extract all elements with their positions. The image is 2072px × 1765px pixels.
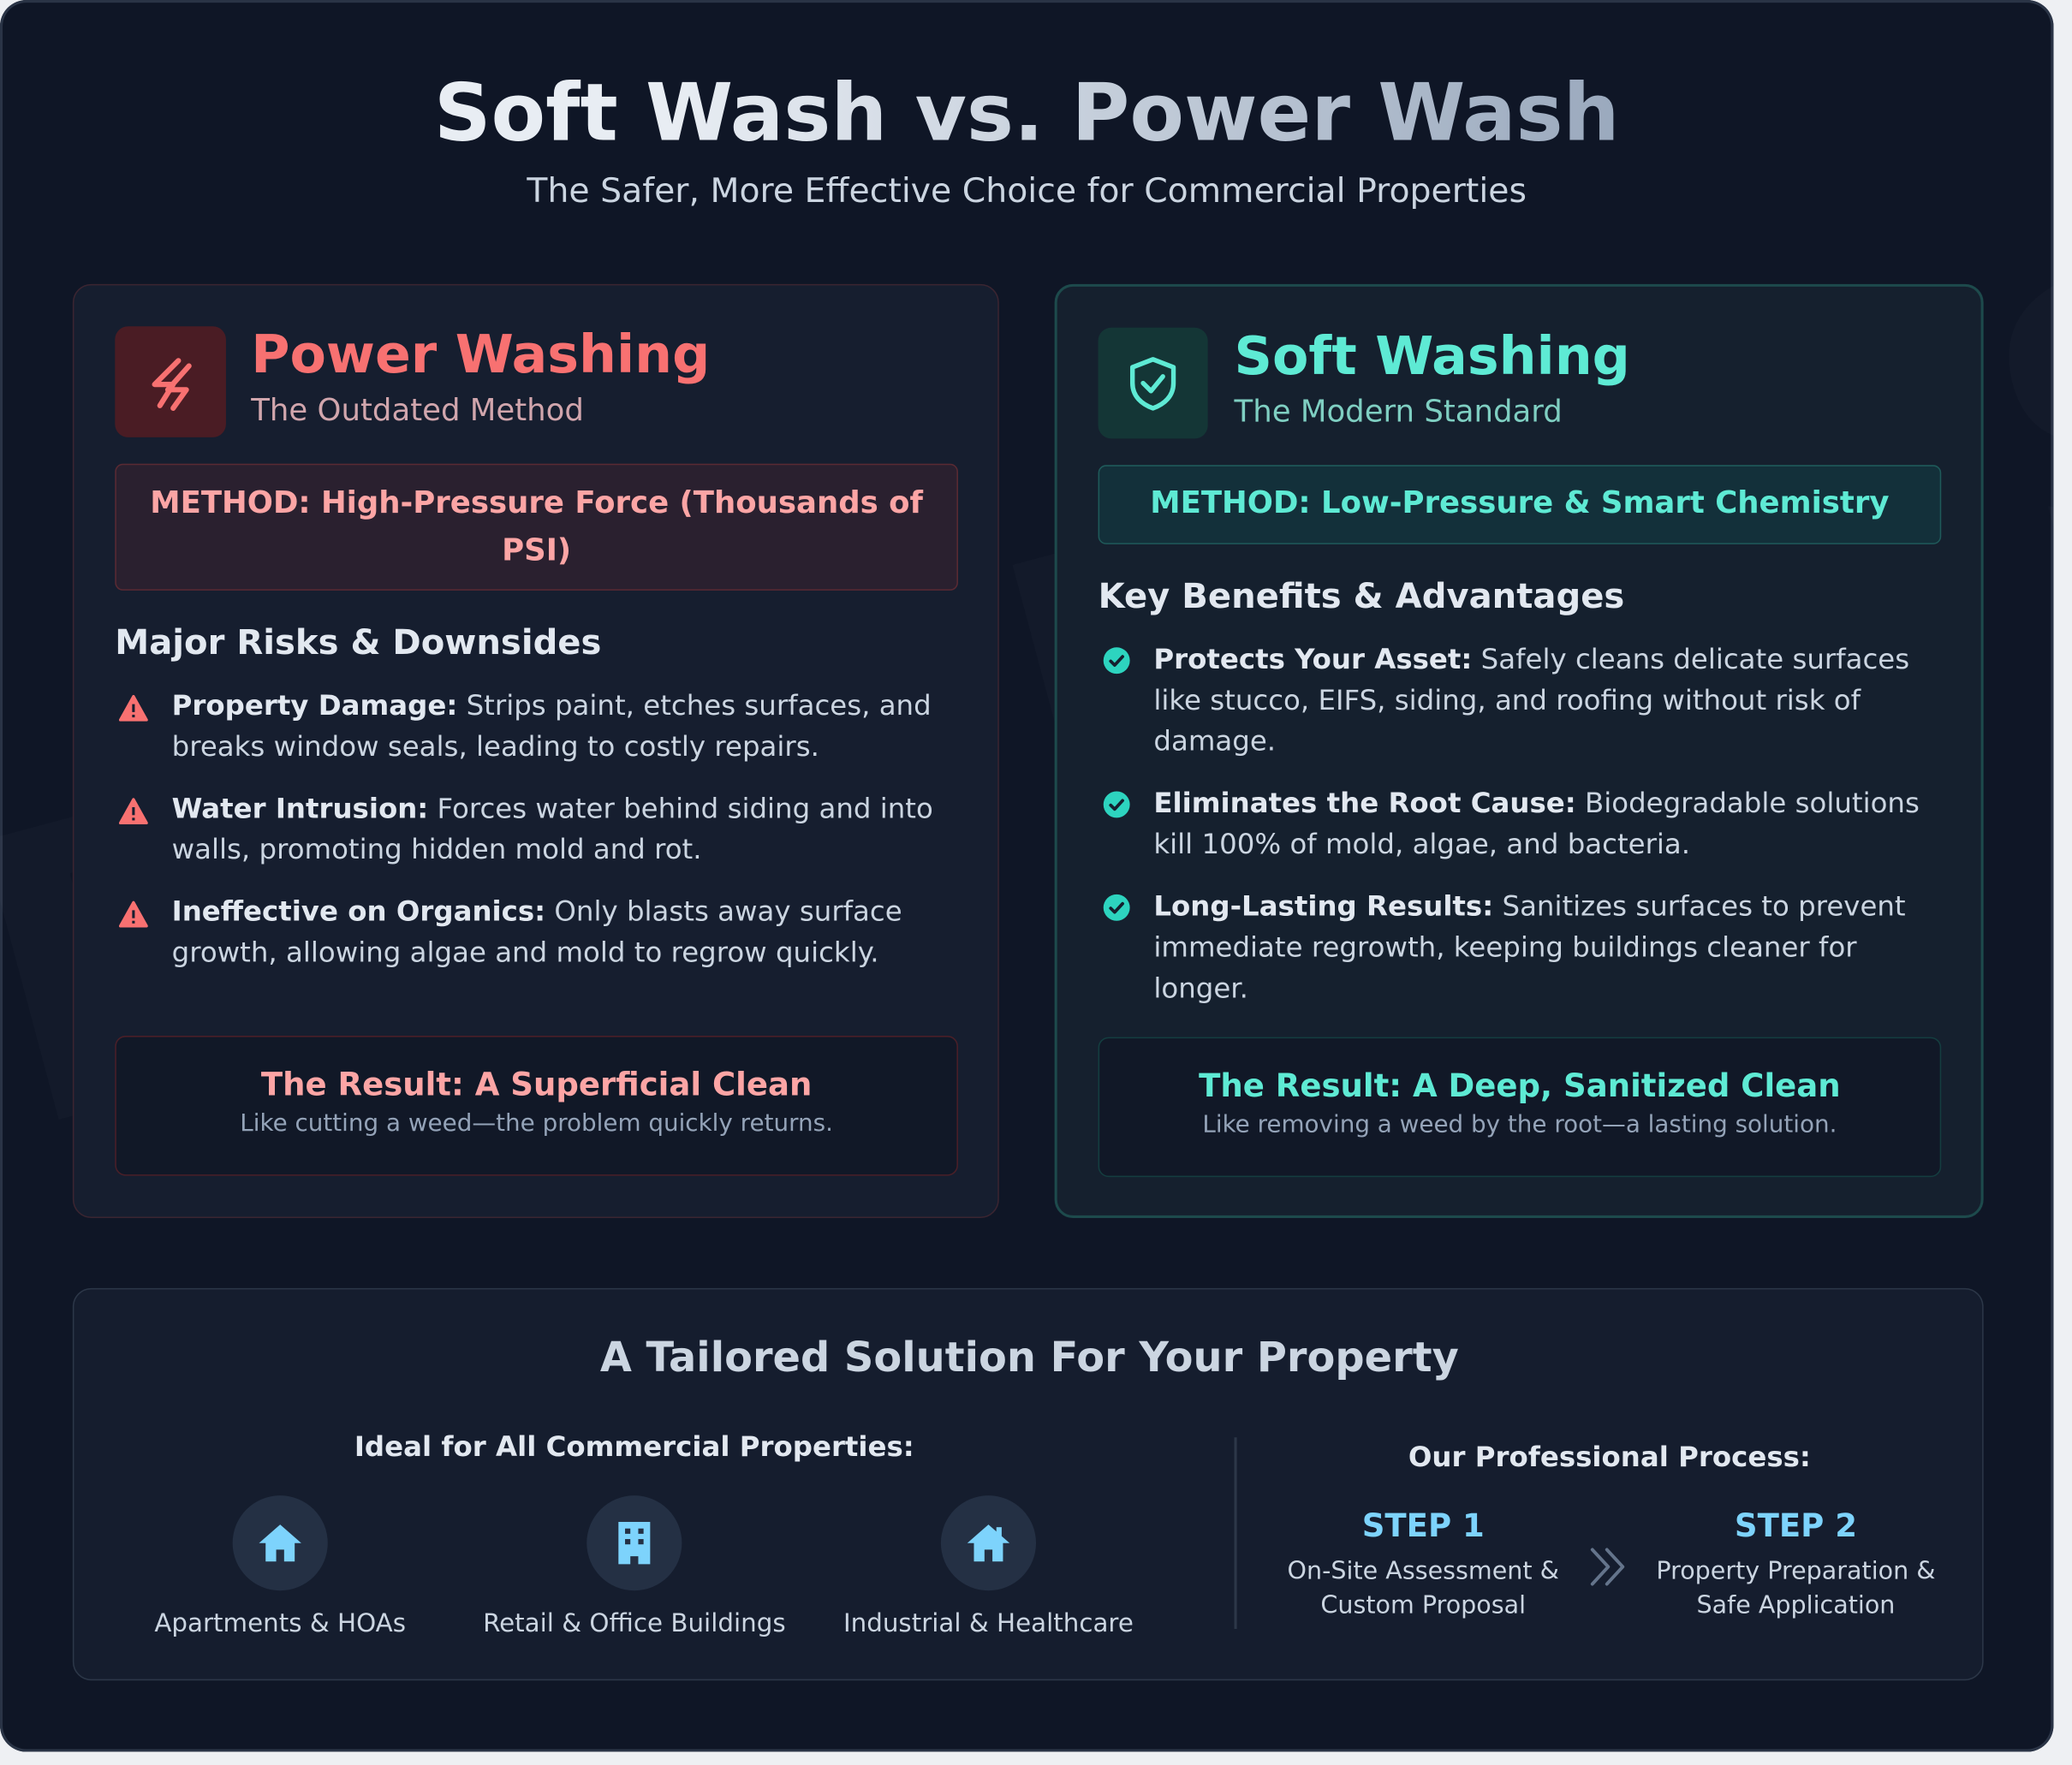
process xyxy=(1288,1441,1936,1619)
step 2 xyxy=(1656,1507,1936,1619)
heading: A Tailored Solution For Your Property xyxy=(600,1334,1459,1382)
risk list xyxy=(119,690,933,968)
subheading: Ideal for All Commercial Properties: xyxy=(354,1431,914,1463)
method box: METHOD: Low-Pressure & Smart Chemistry xyxy=(1150,486,1890,520)
result box: Like removing a weed by the root—a lasting solution. xyxy=(1202,1111,1837,1138)
panel: soft washing xyxy=(1055,284,1984,1218)
benefit: root cause: Eliminates the Root Cause: Biodegradable solutions kill 100% of mold, algae, and bacteria. xyxy=(1153,787,1920,860)
property: apartments: Apartments & HOAs xyxy=(154,1609,406,1638)
benefit: protects: Protects Your Asset: Safely cleans delicate surfaces like stucco, EIFS, siding, and roofing without risk of damage. xyxy=(1153,644,1909,757)
icon: shield xyxy=(1099,328,1208,438)
result box: The Result: A Superficial Clean xyxy=(261,1067,812,1103)
result box xyxy=(115,1036,958,1176)
risk: ineffective: Ineffective on Organics: Only blasts away surface growth, allowing algae and mold to regrow quickly. xyxy=(172,895,902,968)
result box: The Result: A Deep, Sanitized Clean xyxy=(1199,1067,1841,1104)
panel: power washing xyxy=(73,284,999,1218)
benefit: long lasting: Long-Lasting Results: Sanitizes surfaces to prevent immediate regrowth, keeping buildings cleaner for longer. xyxy=(1153,890,1906,1004)
method box xyxy=(115,464,958,591)
subheading: The Outdated Method xyxy=(251,394,584,428)
icon: lightning xyxy=(115,326,226,437)
property: retail office: Retail & Office Buildings xyxy=(483,1609,786,1638)
section heading: Key Benefits & Advantages xyxy=(1099,577,1624,617)
panel: tailored solution xyxy=(73,1288,1984,1680)
property: apartments xyxy=(154,1495,406,1638)
heading: Power Washing xyxy=(251,325,710,386)
step 2: Property Preparation & Safe Application xyxy=(1656,1558,1936,1619)
step 2: STEP 2 xyxy=(1735,1507,1857,1544)
method box xyxy=(1099,465,1941,544)
benefit list xyxy=(1103,644,1920,1004)
step 1: On-Site Assessment & Custom Proposal xyxy=(1288,1558,1559,1619)
result box xyxy=(1099,1037,1941,1177)
step 1: STEP 1 xyxy=(1362,1507,1485,1544)
property: industrial: Industrial & Healthcare xyxy=(843,1609,1134,1638)
property: industrial xyxy=(843,1495,1134,1638)
subheading: The Modern Standard xyxy=(1235,395,1563,430)
section heading: Major Risks & Downsides xyxy=(115,623,601,663)
property types xyxy=(154,1431,1134,1638)
subtitle: The Safer, More Effective Choice for Commercial Properties xyxy=(527,172,1527,211)
method box: METHOD: High-Pressure Force (Thousands of PSI) xyxy=(150,486,923,568)
step 1 xyxy=(1288,1507,1559,1619)
arrow xyxy=(1591,1548,1625,1586)
risk: property damage: Property Damage: Strips paint, etches surfaces, and breaks window seals, leading to costly repairs. xyxy=(172,690,932,763)
title: Soft Wash vs. Power Wash xyxy=(434,68,1620,160)
subheading: Our Professional Process: xyxy=(1408,1441,1811,1473)
heading: Soft Washing xyxy=(1235,326,1630,387)
property: retail office xyxy=(483,1495,786,1638)
result box: Like cutting a weed—the problem quickly returns. xyxy=(240,1109,833,1138)
risk: water intrusion: Water Intrusion: Forces water behind siding and into walls, promoting hidden mold and rot. xyxy=(172,793,933,865)
